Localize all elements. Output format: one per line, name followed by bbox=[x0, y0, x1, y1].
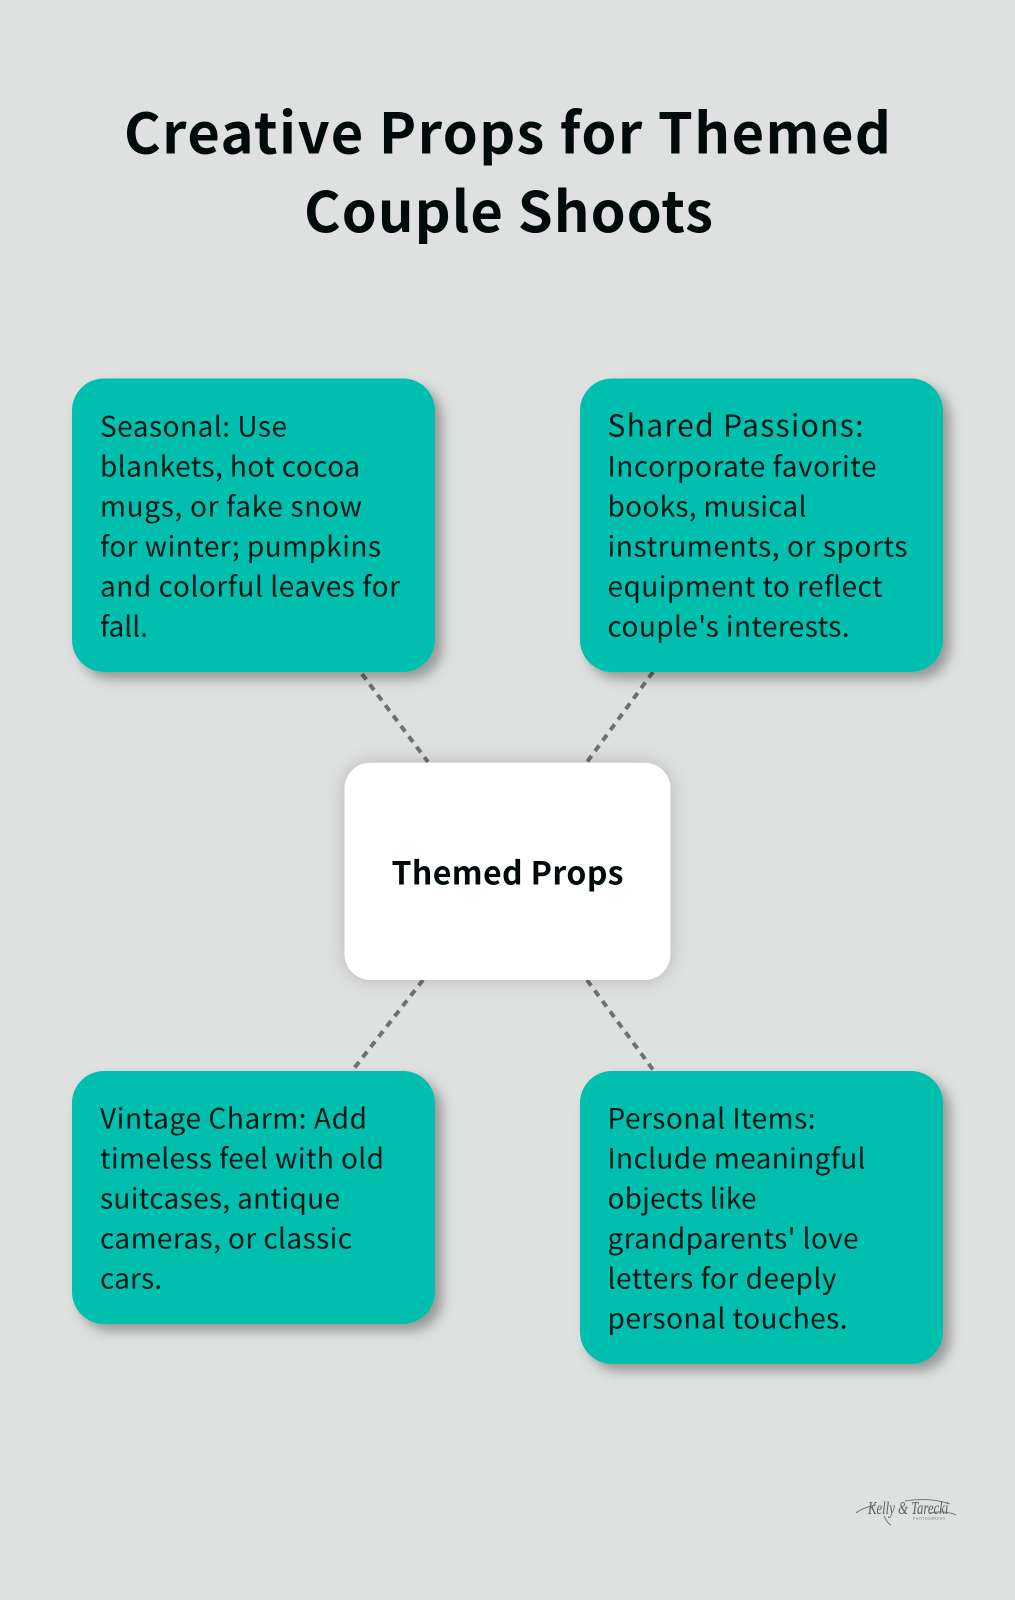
panel: shared passions: couple's interests. bbox=[608, 606, 850, 646]
title: Creative Props for Themed bbox=[124, 90, 891, 170]
panel: personal items: Include meaningful bbox=[608, 1138, 866, 1178]
panel: vintage charm: suitcases, antique bbox=[100, 1178, 340, 1218]
panel: seasonal: fall. bbox=[100, 606, 148, 646]
panel: shared passions: instruments, or sports bbox=[608, 526, 908, 566]
panel: shared passions: Incorporate favorite bbox=[608, 446, 876, 486]
panel: vintage charm: Vintage Charm: Add bbox=[100, 1098, 367, 1138]
panel: shared passions: Shared Passions: bbox=[608, 402, 864, 446]
logo: signature bbox=[856, 1499, 956, 1525]
panel: personal items: letters for deeply bbox=[608, 1258, 837, 1298]
logo: signature: PHOTOGRAPHY bbox=[913, 1517, 945, 1522]
panel: vintage charm: cameras, or classic bbox=[100, 1218, 352, 1258]
panel: vintage charm: timeless feel with old bbox=[100, 1138, 384, 1178]
panel: shared passions bbox=[580, 378, 943, 672]
connector: vintage charm to center bbox=[352, 980, 423, 1071]
panel: vintage charm bbox=[72, 1071, 435, 1324]
panel: center themed props: Themed Props bbox=[392, 848, 624, 894]
panel: personal items: Personal Items: bbox=[608, 1098, 816, 1138]
title bbox=[124, 90, 891, 249]
connector: shared passions to center bbox=[587, 672, 653, 762]
panel: center themed props bbox=[344, 763, 670, 980]
logo: signature: Kelly & Tarecki bbox=[867, 1499, 948, 1519]
panel: seasonal bbox=[72, 378, 435, 672]
connector: personal items to center bbox=[587, 980, 654, 1071]
panel: vintage charm: cars. bbox=[100, 1258, 162, 1298]
panel: personal items bbox=[580, 1071, 943, 1364]
panel: seasonal: Seasonal: Use bbox=[100, 406, 287, 446]
panel: personal items: objects like bbox=[608, 1178, 756, 1218]
panel: shared passions: books, musical bbox=[608, 486, 806, 526]
panel: personal items: personal touches. bbox=[608, 1298, 848, 1338]
panel: seasonal: mugs, or fake snow bbox=[100, 486, 362, 526]
connector: seasonal to center bbox=[362, 674, 428, 762]
panel: shared passions: equipment to reflect bbox=[608, 566, 883, 606]
title: Couple Shoots bbox=[304, 168, 713, 249]
panel: seasonal: for winter; pumpkins bbox=[100, 526, 381, 566]
panel: seasonal: blankets, hot cocoa bbox=[100, 446, 360, 486]
panel: seasonal: and colorful leaves for bbox=[100, 566, 400, 606]
panel: personal items: grandparents' love bbox=[608, 1218, 858, 1258]
